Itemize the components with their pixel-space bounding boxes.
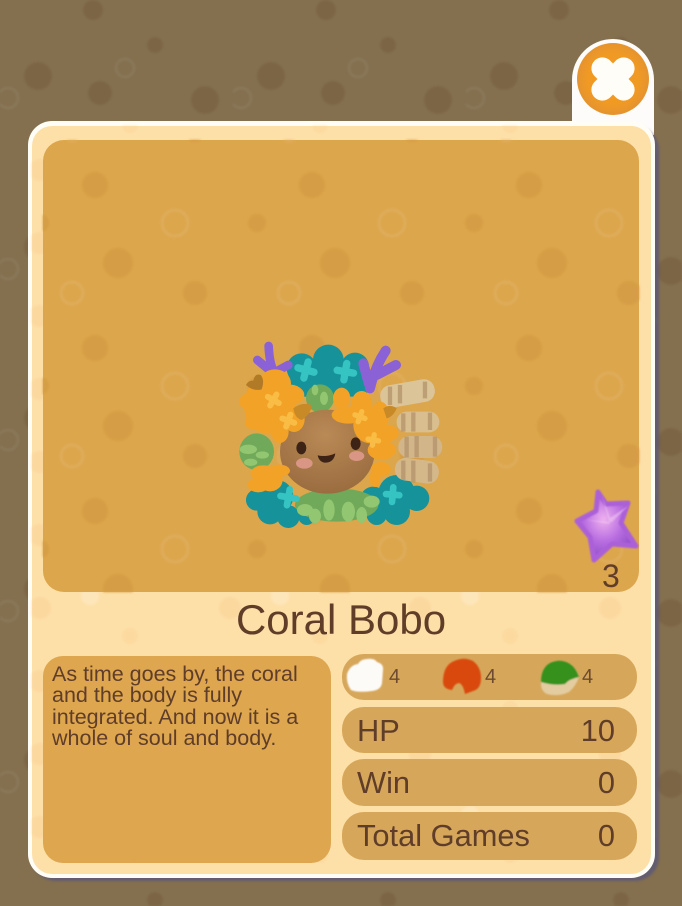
stat: Win: Win	[357, 765, 410, 800]
purple branches	[257, 346, 396, 388]
stat: Total Games: 0	[598, 818, 615, 853]
panel: materials	[342, 654, 637, 700]
green coral bottom and left	[239, 384, 378, 522]
stat: HP: 10	[581, 713, 615, 748]
star count: 3	[602, 558, 620, 594]
stat: Win: 0	[598, 765, 615, 800]
panel: description: As time goes by, the coral	[52, 662, 298, 686]
icon: green turtle shell	[541, 661, 579, 695]
orange corals	[239, 369, 399, 492]
panel: description: integrated. And now it is a	[52, 705, 298, 729]
teal coral base	[246, 345, 429, 528]
count: green turtle shell: 4	[582, 666, 593, 688]
icon: white shell	[347, 659, 383, 692]
stat: Total Games: Total Games	[357, 818, 530, 853]
stat: HP	[342, 707, 637, 753]
card	[28, 121, 659, 881]
stat: HP: HP	[357, 713, 400, 748]
teal crosses	[275, 355, 404, 510]
title: Coral Bobo	[236, 596, 446, 643]
panel: description	[43, 656, 331, 863]
creature: Coral Bobo	[239, 345, 442, 528]
panel: description: and the body is fully	[52, 683, 242, 707]
panel: description: whole of soul and body.	[51, 726, 276, 750]
close button	[572, 39, 654, 135]
stat: Win	[342, 759, 637, 806]
star rating icon	[577, 492, 636, 560]
count: white shell: 4	[389, 666, 400, 688]
face	[296, 437, 364, 469]
body	[280, 410, 375, 494]
icon: red shell	[443, 659, 481, 694]
count: red shell: 4	[485, 666, 496, 688]
tan striped feathers	[378, 378, 442, 485]
stat: Total Games	[342, 812, 637, 860]
panel: creature portrait	[43, 140, 639, 592]
